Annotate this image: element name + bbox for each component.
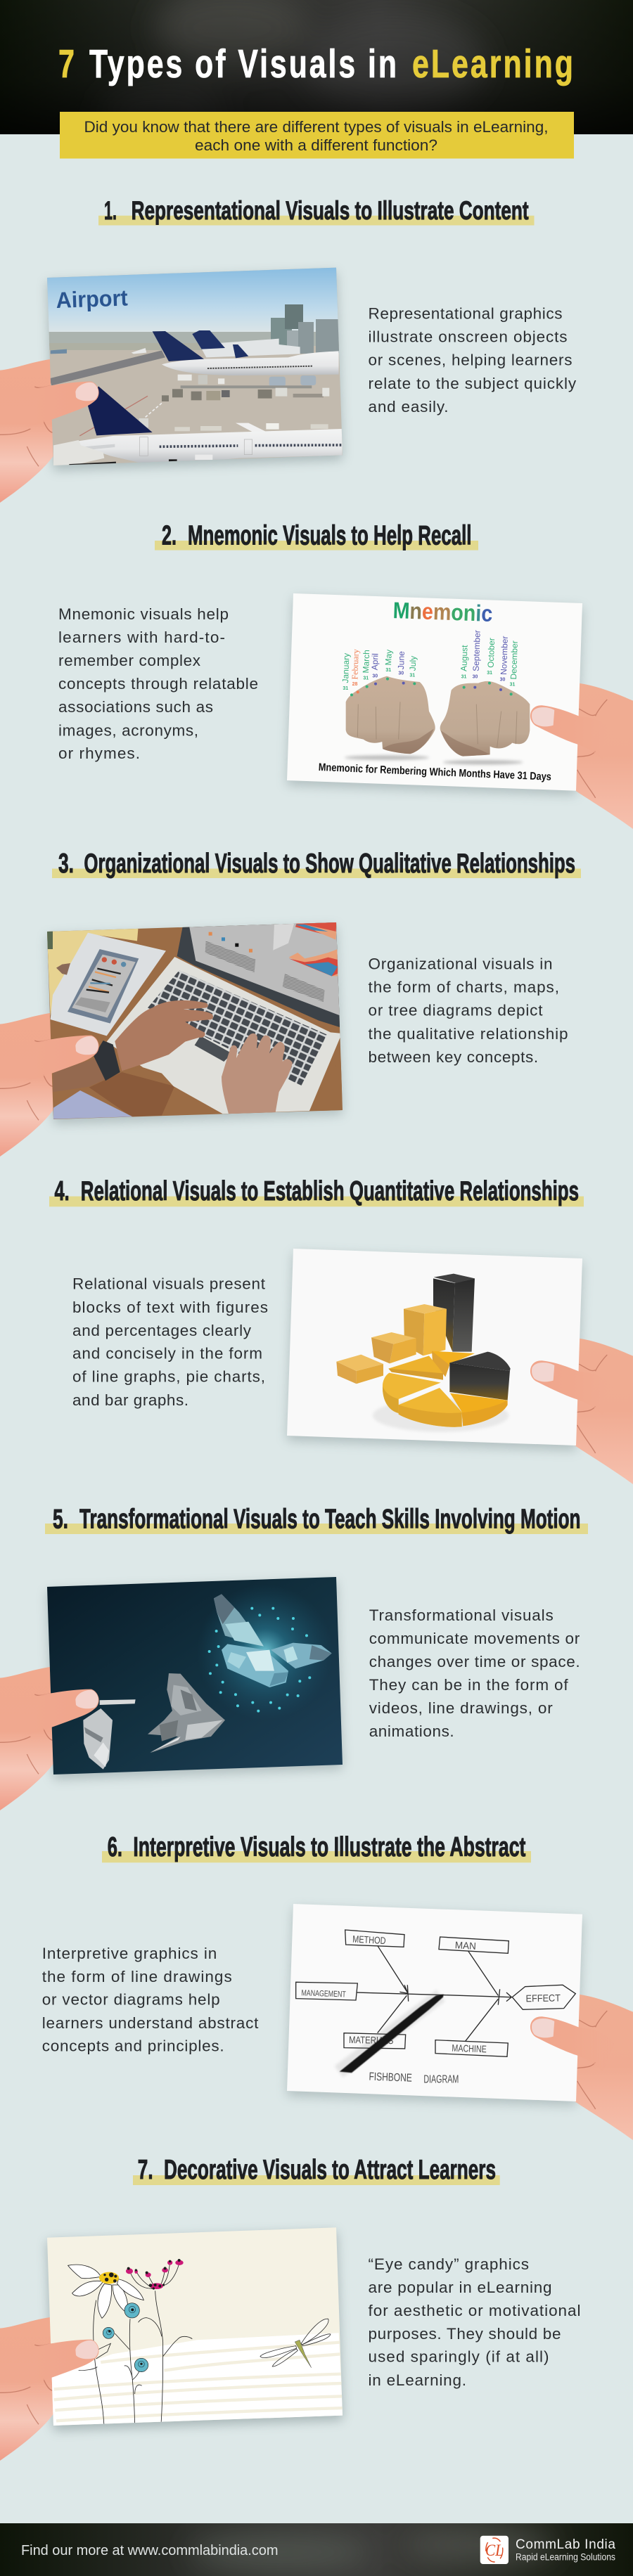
month labels: January: [340, 653, 351, 683]
photo: 3D charts: [281, 1244, 591, 1452]
heading 2: 2.: [162, 520, 177, 551]
logo: CL: [485, 2542, 504, 2559]
thumb: [21, 1036, 99, 1084]
text: organizational: Organizational visuals in: [369, 955, 553, 973]
text: representational: or scenes, helping learners: [369, 352, 573, 369]
text: decorative: used sparingly (if at all): [369, 2348, 549, 2366]
month labels: May: [383, 650, 394, 666]
heading 4: 4.: [55, 1176, 70, 1206]
panel: interpretive visuals: [42, 1832, 633, 2140]
heading 6: 6.: [108, 1832, 122, 1862]
month labels: 28: [352, 682, 358, 687]
card shadow: [47, 1581, 343, 1779]
text: decorative: purposes. They should be: [369, 2325, 561, 2343]
panel: transformational visuals: [0, 1505, 588, 1810]
text: relational: [72, 1275, 268, 1409]
text: mnemonic: or rhymes.: [58, 745, 140, 762]
pie: [432, 1351, 475, 1377]
month labels: November: [499, 636, 510, 675]
thumb: [530, 1360, 614, 1416]
heading 2: Mnemonic Visuals to Help Recall: [188, 520, 471, 551]
card shadow: [287, 598, 582, 795]
black bar: [452, 1278, 475, 1352]
text: relational: of line graphs, pie charts,: [72, 1368, 265, 1386]
caption: Mnemonic for Rembering Which Months Have 31 Days: [318, 761, 551, 783]
text: organizational: or tree diagrams depict: [369, 1001, 543, 1019]
heading 5: 5.: [53, 1505, 68, 1535]
photo: fishbone diagram: FISHBONE: [369, 2071, 412, 2085]
text: interpretive: [42, 1945, 259, 2055]
photo: fishbone diagram: MATERIALS: [349, 2034, 394, 2046]
text: mnemonic: remember complex: [58, 652, 201, 669]
text: transformational: animations.: [369, 1722, 454, 1740]
photo: fishbone diagram: MANAGEMENT: [301, 1988, 346, 1999]
heading 7: [133, 2155, 500, 2185]
text: representational: Representational graphics: [369, 305, 563, 323]
logo: [480, 2536, 615, 2564]
dragonfly: [260, 2319, 331, 2368]
text: representational: and easily.: [369, 398, 449, 416]
intro callout: Did you know that there are different types of visuals in eLearning,: [84, 118, 549, 136]
hand behind card: [0, 1013, 54, 1157]
text: decorative: [369, 2255, 581, 2389]
month labels: 30: [398, 671, 404, 676]
month labels: 31: [385, 668, 391, 673]
month labels: April: [370, 653, 380, 670]
hand behind card: [575, 1995, 633, 2140]
heading 2: [155, 520, 478, 551]
heading 1: 1.: [104, 196, 117, 225]
month labels: 30: [372, 674, 378, 678]
text: decorative: for aesthetic or motivational: [369, 2302, 581, 2319]
text: transformational: Transformational visuals: [369, 1606, 554, 1624]
panel: representational visuals: [0, 196, 577, 503]
text: organizational: the form of charts, maps,: [369, 979, 559, 996]
title: eLearning: [412, 41, 575, 86]
photo: fishbone diagram: EFFECT: [525, 1992, 561, 2004]
thumb: [530, 2016, 614, 2072]
text: representational: illustrate onscreen objects: [369, 328, 567, 346]
pen: [339, 1995, 444, 2073]
thumb: [21, 1689, 99, 1738]
text: relational: and percentages clearly: [72, 1322, 252, 1339]
heading 7: 7.: [138, 2155, 153, 2185]
intro callout: each one with a different function?: [195, 136, 437, 154]
chrysalis: [100, 1699, 136, 1705]
text: mnemonic: [58, 605, 258, 762]
glow rays and dots: [208, 1607, 311, 1713]
heading 3: 3.: [58, 849, 74, 879]
card shadow: [47, 2232, 343, 2430]
text: mnemonic: learners with hard-to-: [58, 629, 225, 646]
thumb: [530, 705, 614, 761]
text: organizational: [369, 955, 568, 1066]
word: Mnemonic: Mnemonic: [392, 597, 493, 626]
footer link text: Find our more at www.commlabindia.com: [21, 2543, 279, 2558]
hand behind card: [0, 359, 54, 503]
text: organizational: the qualitative relationship: [369, 1025, 568, 1043]
text: transformational: videos, line drawings, or: [369, 1699, 553, 1717]
moth: [148, 1673, 225, 1753]
text: organizational: between key concepts.: [369, 1048, 538, 1066]
hand behind card: [0, 2317, 54, 2461]
bars: [423, 1309, 447, 1355]
month labels: August: [459, 645, 470, 671]
photo: fishbone diagram: DIAGRAM: [423, 2074, 459, 2086]
hand behind card: [575, 1339, 633, 1484]
month labels: 30: [500, 678, 506, 683]
photo: laptop: [44, 920, 347, 1123]
text: transformational: communicate movements or: [369, 1630, 580, 1647]
text: interpretive: concepts and principles.: [42, 2037, 224, 2055]
month labels: 30: [473, 674, 478, 679]
text: relational: blocks of text with figures: [72, 1299, 268, 1316]
photo: fishbone diagram: MACHINE: [452, 2042, 487, 2054]
month labels: July: [408, 656, 418, 671]
text: decorative: “Eye candy” graphics: [369, 2255, 529, 2273]
text: transformational: [369, 1606, 580, 1740]
photo: airport: Airport: [56, 285, 129, 313]
photo: airport: [42, 264, 352, 471]
hand behind card: [575, 683, 633, 829]
month labels: 31: [343, 686, 348, 691]
text: mnemonic: Mnemonic visuals help: [58, 605, 229, 623]
butterfly: [222, 1644, 288, 1687]
text: transformational: changes over time or space.: [369, 1653, 580, 1670]
panel: organizational visuals: [0, 849, 581, 1157]
white flower: [68, 2265, 143, 2318]
month labels: [340, 630, 520, 696]
photo: fishbone diagram: [281, 1898, 591, 2106]
month labels: 31: [487, 671, 492, 676]
month labels: 31: [510, 683, 516, 688]
panel: decorative visuals: [0, 2155, 581, 2461]
month labels: February: [350, 649, 361, 680]
logo: Rapid eLearning Solutions: [516, 2552, 615, 2563]
card shadow: [287, 1253, 582, 1450]
text: decorative: are popular in eLearning: [369, 2279, 551, 2296]
month labels: 31: [409, 674, 415, 678]
text: decorative: in eLearning.: [369, 2371, 466, 2389]
text: representational: [369, 305, 577, 416]
text: transformational: They can be in the form of: [369, 1676, 568, 1694]
text: relational: and bar graphs.: [72, 1391, 188, 1409]
panel: relational visuals: [49, 1176, 633, 1484]
thumb: [21, 382, 99, 430]
text: mnemonic: associations such as: [58, 698, 213, 716]
text: interpretive: or vector diagrams help: [42, 1991, 220, 2009]
header banner: [0, 0, 633, 141]
blue roses: [103, 2303, 148, 2372]
month labels: 31: [363, 676, 369, 681]
text: interpretive: Interpretive graphics in: [42, 1945, 217, 1962]
text: relational: and concisely in the form: [72, 1344, 262, 1363]
title: 7: [58, 41, 75, 86]
month labels: 31: [461, 675, 467, 680]
footer: [0, 2523, 633, 2576]
month labels: October: [486, 638, 497, 668]
text: interpretive: the form of line drawings: [42, 1968, 232, 1985]
panel: mnemonic visuals: [58, 520, 633, 829]
illustration: flowers and dragonfly: [47, 2227, 343, 2426]
magenta buds: [126, 2260, 184, 2289]
hand behind card: [0, 1667, 54, 1810]
photo: fishbone diagram: METHOD: [352, 1933, 386, 1946]
card shadow: [47, 927, 343, 1124]
card shadow: [287, 1908, 582, 2106]
month labels: March: [361, 650, 371, 674]
logo: CommLab India: [516, 2537, 615, 2552]
month labels: June: [396, 651, 407, 669]
intro callout: [60, 112, 574, 159]
text: relational: Relational visuals present: [72, 1275, 266, 1293]
photo: mnemonic fists: [287, 593, 582, 791]
text: representational: relate to the subject quickly: [369, 375, 577, 392]
card shadow: [47, 272, 343, 470]
photo: butterfly metamorphosis: [42, 1571, 352, 1779]
text: mnemonic: images, acronyms,: [58, 722, 198, 740]
text: interpretive: learners understand abstract: [42, 2014, 259, 2032]
thumb: [21, 2340, 99, 2388]
title: Types of Visuals in: [89, 41, 399, 86]
photo: fishbone diagram: MAN: [454, 1939, 476, 1952]
month labels: December: [509, 640, 520, 680]
text: mnemonic: concepts through relatable: [58, 675, 258, 693]
month labels: September: [471, 630, 482, 671]
